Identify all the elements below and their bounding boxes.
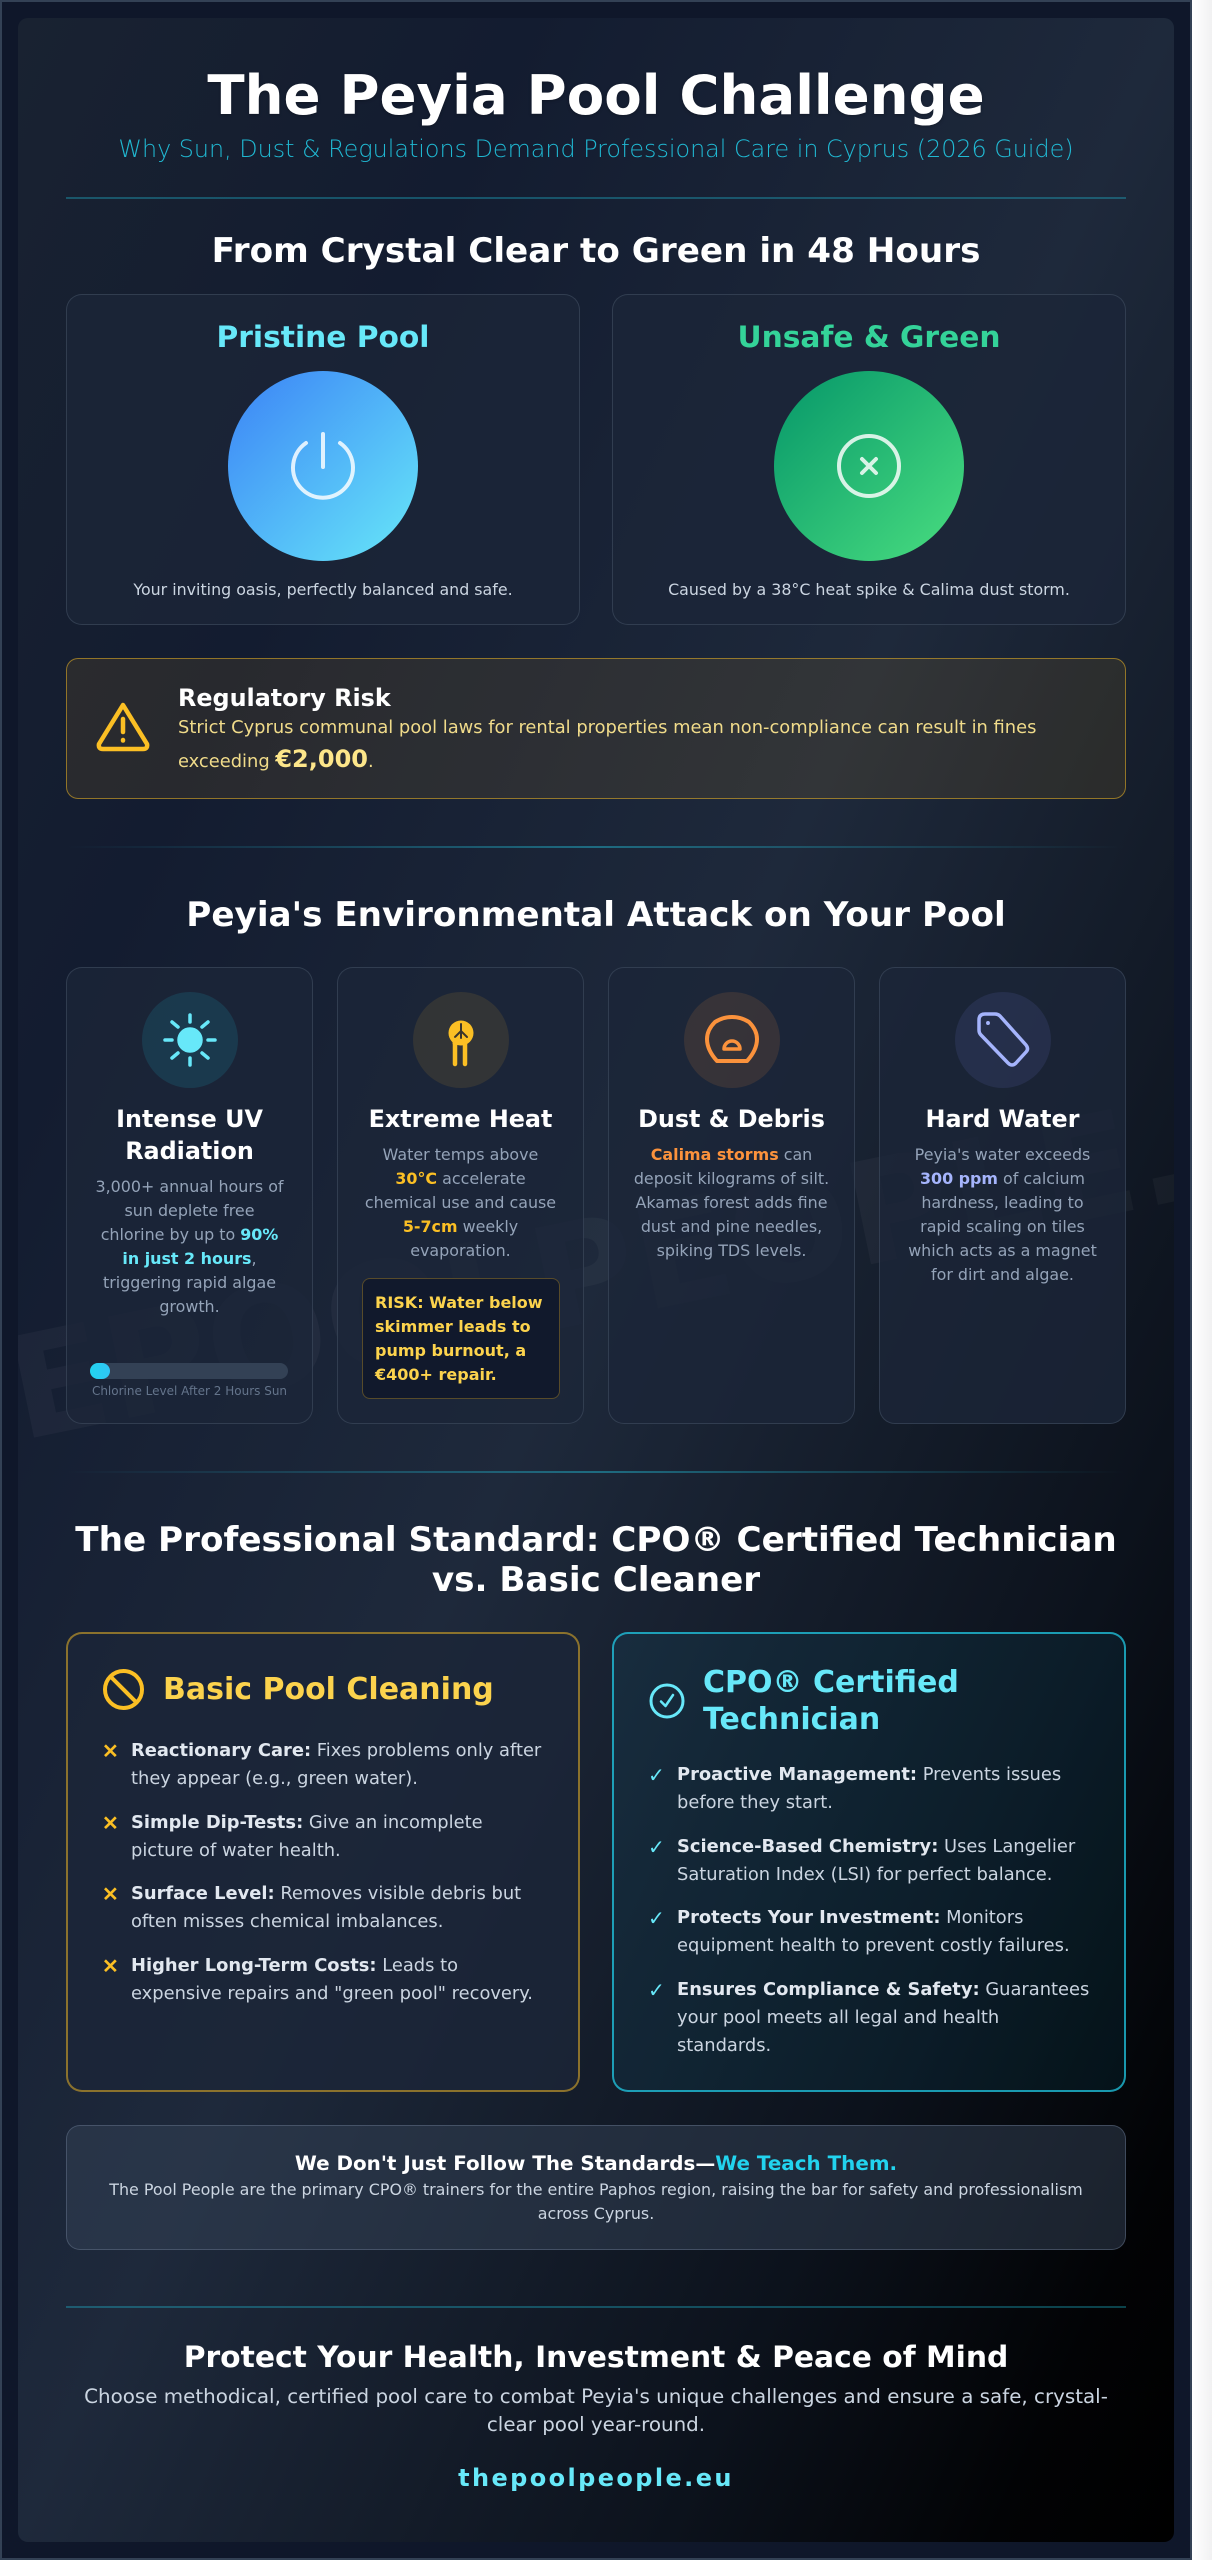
icon: warning triangle: [96, 702, 150, 752]
heat text: Water temps above: [383, 1145, 538, 1164]
CPO heading: CPO® Certified: [703, 1665, 959, 1700]
panel: unsafe green: [612, 294, 1126, 625]
pristine caption: Your inviting oasis, perfectly balanced and safe.: [133, 580, 513, 599]
UV text: triggering rapid algae: [103, 1273, 276, 1292]
UV text: growth.: [159, 1297, 220, 1316]
list item: picture of water health.: [131, 1840, 341, 1861]
UV heading line 2: Radiation: [125, 1137, 254, 1165]
dust text: [634, 1145, 829, 1260]
list item: your pool meets all legal and health: [677, 2007, 999, 2028]
list item: Higher Long-Term Costs: Leads to: [131, 1955, 458, 1976]
UV text: chlorine by up to 90%: [101, 1225, 278, 1244]
hard water text: which acts as a magnet: [908, 1241, 1097, 1260]
pristine heading: Pristine Pool: [217, 320, 429, 355]
heading: environmental attack: Peyia's Environmental Attack on Your Pool: [186, 895, 1006, 935]
callout: we teach the standards: [66, 2125, 1126, 2250]
callout text: The Pool People are the primary CPO® trainers for the entire Paphos region, raising the bar for safety and professionalism: [109, 2180, 1083, 2199]
heat text: chemical use and cause: [365, 1193, 556, 1212]
UV text: 3,000+ annual hours of: [95, 1177, 284, 1196]
subtitle: Why Sun, Dust & Regulations Demand Professional Care in Cyprus (2026 Guide): [118, 135, 1074, 163]
panel: intense UV: [66, 967, 313, 1424]
hard water heading: Hard Water: [926, 1105, 1079, 1133]
green circle with x icon: [774, 371, 964, 561]
hard water text: for dirt and algae.: [931, 1265, 1074, 1284]
CPO heading: Technician: [703, 1702, 880, 1737]
list item: [102, 1954, 533, 2004]
title: The Peyia Pool Challenge: [207, 63, 985, 127]
list item: [102, 1811, 483, 1861]
panel: dust and debris: [608, 967, 855, 1424]
list item: ✓: [648, 1835, 665, 1859]
unsafe heading: Unsafe & Green: [738, 320, 1000, 355]
list item: often misses chemical imbalances.: [131, 1911, 443, 1932]
list item: ✕: [102, 1882, 119, 1906]
dust heading: Dust & Debris: [638, 1105, 825, 1133]
CPO list: [648, 1763, 1089, 2056]
list item: they appear (e.g., green water).: [131, 1768, 418, 1789]
heat text: 30°C accelerate: [395, 1169, 526, 1188]
list item: ✓: [648, 1763, 665, 1787]
UV text: [95, 1177, 284, 1316]
risk text: Strict Cyprus communal pool laws for rental properties mean non-compliance can result in fines: [178, 717, 1036, 738]
list item: Ensures Compliance & Safety: Guarantees: [677, 1979, 1089, 2000]
heat heading: Extreme Heat: [369, 1105, 552, 1133]
dust text: deposit kilograms of silt.: [634, 1169, 829, 1188]
list item: Protects Your Investment: Monitors: [677, 1907, 1023, 1928]
hard water text: Peyia's water exceeds: [915, 1145, 1090, 1164]
heading: 48 hours: From Crystal Clear to Green in 48 Hours: [212, 231, 980, 271]
right page margin: [1192, 0, 1212, 2560]
list item: equipment health to prevent costly failures.: [677, 1935, 1070, 1956]
list item: [102, 1739, 542, 1789]
list item: ✓: [648, 1906, 665, 1930]
list item: Reactionary Care: Fixes problems only after: [131, 1740, 541, 1761]
list item: Proactive Management: Prevents issues: [677, 1764, 1061, 1785]
icon: heat: [413, 992, 509, 1088]
list item: ✕: [102, 1811, 119, 1835]
risk text: exceeding €2,000.: [178, 745, 374, 773]
chlorine progress bar: [90, 1363, 288, 1379]
unsafe caption: Caused by a 38°C heat spike & Calima dust storm.: [668, 580, 1070, 599]
risk heading: Regulatory Risk: [178, 684, 391, 712]
callout: regulatory risk: [66, 658, 1126, 799]
list item: ✕: [102, 1954, 119, 1978]
hard water text: rapid scaling on tiles: [920, 1217, 1085, 1236]
dust text: spiking TDS levels.: [657, 1241, 806, 1260]
footer heading: Protect Your Health, Investment & Peace of Mind: [184, 2340, 1008, 2375]
basic list: [102, 1739, 542, 2004]
list item: Science-Based Chemistry: Uses Langelier: [677, 1836, 1075, 1857]
panel: hard water: [879, 967, 1126, 1424]
icon: tag: [955, 992, 1051, 1088]
heat text: 5-7cm weekly: [403, 1217, 518, 1236]
panel: CPO certified technician: [612, 1632, 1126, 2092]
dust text: Calima storms can: [651, 1145, 812, 1164]
dust text: Akamas forest adds fine: [635, 1193, 828, 1212]
hard water text: [908, 1145, 1097, 1284]
list item: Surface Level: Removes visible debris but: [131, 1883, 521, 1904]
UV heading: Intense UV: [116, 1105, 263, 1133]
list item: before they start.: [677, 1792, 833, 1813]
callout: pump risk: RISK: Water below: [375, 1293, 543, 1312]
icon: ban: [103, 1669, 144, 1710]
risk text: [178, 717, 1036, 773]
heading: professional standard: [75, 1520, 1117, 1600]
list item: ✓: [648, 1978, 665, 2002]
basic heading: Basic Pool Cleaning: [163, 1672, 494, 1707]
CPO heading: [703, 1665, 959, 1737]
panel: extreme heat: [337, 967, 584, 1424]
icon: sun: [142, 992, 238, 1088]
website link: thepoolpeople.eu: [458, 2464, 734, 2492]
heat text: [365, 1145, 556, 1260]
bar label: Chlorine Level After 2 Hours Sun: [92, 1384, 287, 1398]
dust text: dust and pine needles,: [641, 1217, 822, 1236]
icon: dust: [684, 992, 780, 1088]
callout: pump risk: €400+ repair.: [375, 1365, 497, 1384]
panel: basic pool cleaning: [66, 1632, 580, 2092]
hard water text: hardness, leading to: [921, 1193, 1084, 1212]
list item: Saturation Index (LSI) for perfect balance.: [677, 1864, 1052, 1885]
list item: [648, 1835, 1076, 1885]
UV text: in just 2 hours,: [122, 1249, 257, 1268]
callout: pump risk: skimmer leads to: [375, 1317, 531, 1336]
heat text: evaporation.: [410, 1241, 511, 1260]
list item: Simple Dip-Tests: Give an incomplete: [131, 1812, 483, 1833]
icon: check circle: [650, 1684, 684, 1718]
list item: ✕: [102, 1739, 119, 1763]
list item: [102, 1882, 521, 1932]
list item: standards.: [677, 2035, 771, 2056]
callout text line 2: across Cyprus.: [538, 2204, 654, 2223]
callout: pump risk: [362, 1278, 560, 1399]
UV text: sun deplete free: [124, 1201, 254, 1220]
header: [118, 63, 1074, 163]
footer text line 2: clear pool year-round.: [487, 2413, 705, 2436]
list item: expensive repairs and "green pool" recovery.: [131, 1983, 533, 2004]
callout heading: We Don't Just Follow The Standards—We Teach Them.: [295, 2152, 897, 2175]
heading: professional standard: vs. Basic Cleaner: [432, 1560, 760, 1600]
pristine pool circle with power icon: [228, 371, 418, 561]
hard water text: 300 ppm of calcium: [920, 1169, 1085, 1188]
heading: professional standard: The Professional Standard: CPO® Certified Technician: [75, 1520, 1117, 1560]
list item: [648, 1763, 1061, 1813]
list item: [648, 1978, 1089, 2056]
list item: [648, 1906, 1070, 1956]
panel: pristine pool: [66, 294, 580, 625]
footer: [84, 2340, 1108, 2492]
callout: pump risk: pump burnout, a: [375, 1341, 526, 1360]
footer text: Choose methodical, certified pool care to combat Peyia's unique challenges and ensure a safe, crystal-: [84, 2385, 1108, 2408]
